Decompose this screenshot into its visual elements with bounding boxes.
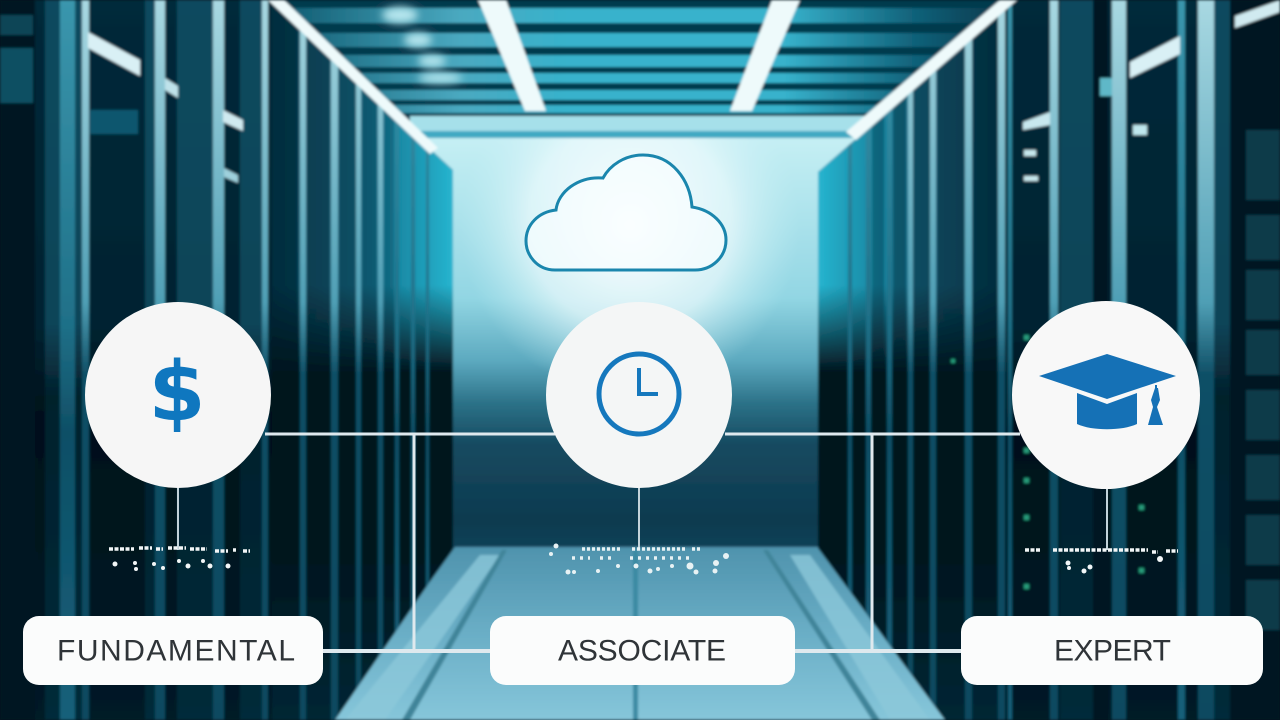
icon: graduation cap circle: [1012, 301, 1200, 489]
label: fundamental: [23, 616, 323, 685]
panel: associate time column: [490, 302, 795, 685]
icon: cloud: [526, 155, 726, 270]
right-edge server blocks: [1246, 130, 1280, 630]
panel: fundamental cost column: [23, 302, 323, 685]
floor: [330, 547, 950, 720]
left server racks: [0, 0, 460, 720]
icon: dollar circle: $: [148, 345, 206, 440]
back wall with glow: [425, 138, 855, 550]
label: expert: EXPERT: [1054, 634, 1171, 668]
ceiling with light stripes: [286, 0, 998, 140]
label: expert: [961, 616, 1263, 685]
garbled caption dots: [549, 544, 729, 574]
icon: clock circle: [546, 302, 732, 488]
garbled caption dots: [1025, 550, 1178, 574]
green server LEDs: [951, 335, 1144, 589]
connector lines: [178, 434, 1107, 651]
ceiling light strips: [268, 0, 1017, 154]
panel: expert education column: [961, 301, 1263, 685]
label: associate: ASSOCIATE: [558, 634, 726, 668]
garbled caption dots: [109, 548, 250, 571]
right server racks: [815, 0, 1280, 720]
icon: dollar circle: [85, 302, 271, 488]
label: associate: [490, 616, 795, 685]
label: fundamental: FUNDAMENTAL: [57, 634, 295, 668]
